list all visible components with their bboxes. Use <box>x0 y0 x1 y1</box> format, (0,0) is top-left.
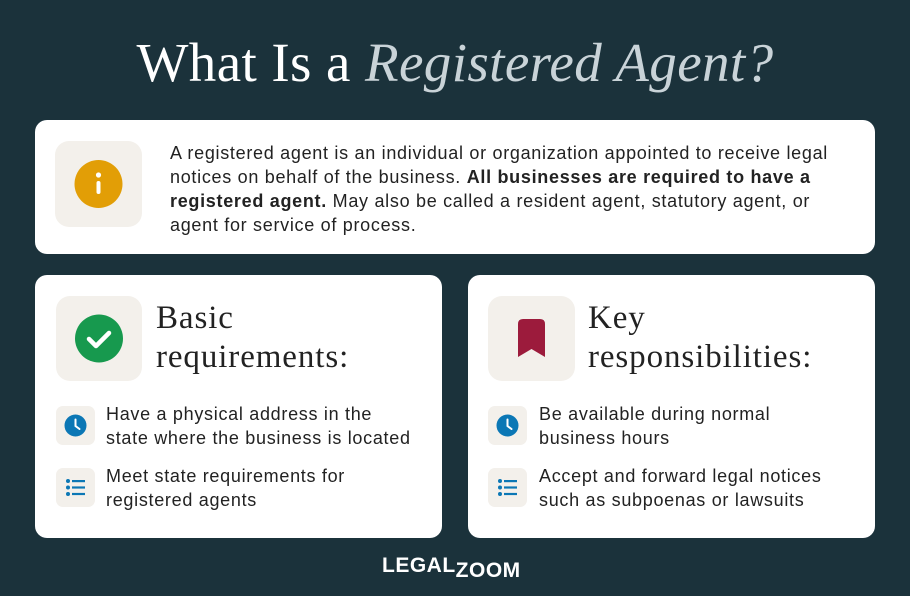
item: state requirements: registered agents <box>106 490 257 510</box>
icon: bookmark <box>488 296 575 381</box>
panel: definition <box>35 120 875 254</box>
item: address: state where the business is located <box>106 428 411 448</box>
icon: info <box>55 141 142 227</box>
item: notices: such as subpoenas or lawsuits <box>539 490 804 510</box>
heading <box>156 300 349 375</box>
panel: key responsibilities <box>468 275 875 538</box>
panel: basic requirements <box>35 275 442 538</box>
item: notices: Accept and forward legal notices <box>539 466 822 486</box>
text: definition: registered agent. May also be called a resident agent, statutory agent, or <box>170 191 810 211</box>
title: What Is a Registered Agent? <box>136 32 774 93</box>
heading: requirements: <box>156 339 349 375</box>
item: notices <box>488 466 822 510</box>
text: definition: A registered agent is an individual or organization appointed to receive legal <box>170 143 828 163</box>
text: definition: notices on behalf of the business. All businesses are required to have a <box>170 167 811 187</box>
item: address <box>56 404 411 448</box>
heading: Basic <box>156 300 234 336</box>
heading: responsibilities: <box>588 339 812 375</box>
item: availability: Be available during normal <box>539 404 770 424</box>
item: state requirements <box>56 466 345 510</box>
item: availability <box>488 404 770 448</box>
heading <box>588 300 812 375</box>
item: availability: business hours <box>539 428 670 448</box>
heading: Key <box>588 300 646 336</box>
icon: check <box>56 296 142 381</box>
text: definition <box>170 143 828 235</box>
item: state requirements: Meet state requirements for <box>106 466 345 486</box>
item: address: Have a physical address in the <box>106 404 372 424</box>
logo: LEGALZOOM <box>382 554 521 582</box>
text: definition: agent for service of process. <box>170 215 416 235</box>
